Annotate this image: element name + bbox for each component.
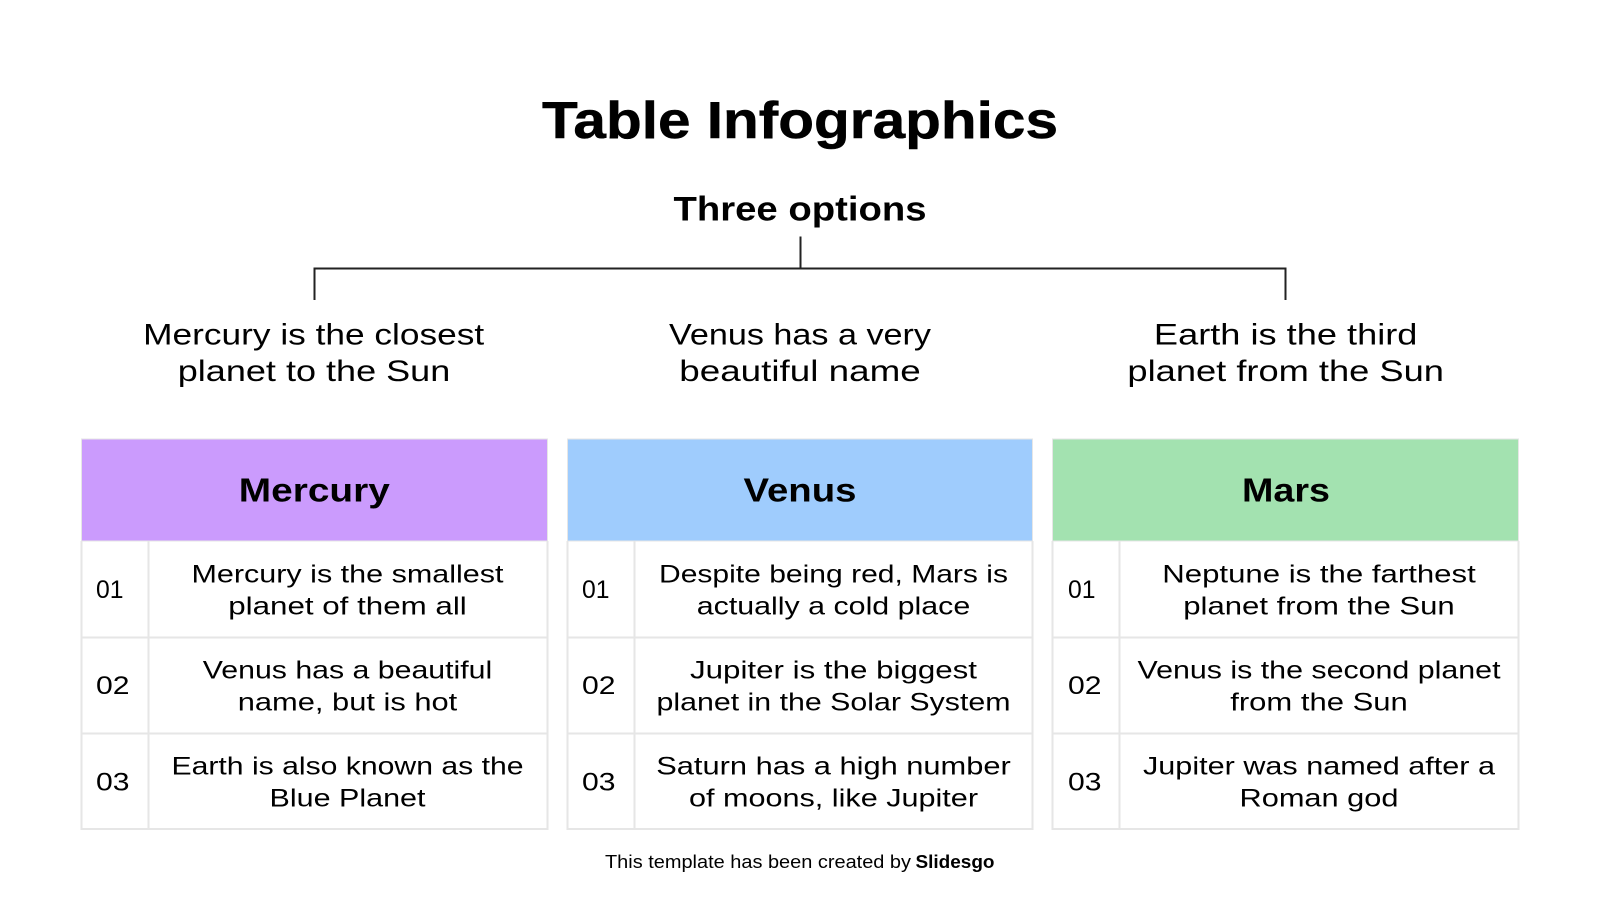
- row 01: actually a cold place: [697, 593, 970, 621]
- row 02: planet in the Solar System: [656, 689, 1010, 717]
- row 01: 01: [582, 576, 610, 604]
- row 01: planet from the Sun: [1183, 593, 1455, 621]
- row 02: [582, 657, 1010, 717]
- option description: earth: Earth is the third: [1154, 318, 1417, 352]
- option description: mercury: planet to the Sun: [178, 355, 450, 388]
- row 02: name, but is hot: [238, 689, 457, 717]
- row 03: [1068, 752, 1495, 812]
- option description: mercury: [143, 318, 485, 388]
- row 03: 03: [1068, 768, 1102, 796]
- row 03: 03: [582, 768, 616, 796]
- bracket connector: [314, 236, 1286, 300]
- header: mars: [1052, 439, 1518, 541]
- row 02: [1068, 657, 1501, 717]
- table: mercury: [82, 439, 548, 829]
- row 02: from the Sun: [1230, 689, 1408, 717]
- table grid: [568, 541, 1032, 829]
- row 03: Earth is also known as the: [172, 752, 524, 780]
- table grid: [1052, 541, 1518, 829]
- row 01: 01: [1068, 576, 1096, 604]
- option description: mercury: Mercury is the closest: [143, 318, 485, 352]
- option description: earth: [1127, 318, 1444, 388]
- row 03: [96, 752, 524, 812]
- footer credit: Slidesgo: [916, 852, 995, 872]
- row 02: Jupiter is the biggest: [690, 657, 977, 685]
- row 02: Venus has a beautiful: [203, 657, 492, 685]
- row 02: [96, 657, 492, 717]
- row 03: Blue Planet: [270, 784, 426, 812]
- table: mars: [1052, 439, 1518, 829]
- subtitle: three options: Three options: [674, 190, 926, 228]
- header: mercury: [82, 439, 548, 541]
- option description: venus: Venus has a very: [669, 318, 931, 352]
- row 01: [96, 561, 504, 621]
- row 03: Roman god: [1240, 784, 1398, 812]
- table: venus: [568, 439, 1032, 829]
- row 02: 02: [1068, 672, 1102, 700]
- header: mars: Mars: [1242, 472, 1330, 508]
- header: venus: Venus: [744, 472, 856, 508]
- row 03: Saturn has a high number: [656, 752, 1011, 780]
- row 01: Mercury is the smallest: [192, 561, 504, 589]
- row 03: 03: [96, 768, 130, 796]
- row 02: 02: [582, 672, 616, 700]
- header: venus: [568, 439, 1032, 541]
- table grid: [82, 541, 548, 829]
- row 02: 02: [96, 672, 130, 700]
- footer credit: This template has been created by: [605, 852, 911, 872]
- title: Table Infographics: [542, 92, 1058, 150]
- row 01: 01: [96, 576, 124, 604]
- option description: venus: beautiful name: [679, 355, 921, 388]
- row 01: [1068, 561, 1476, 621]
- row 02: Venus is the second planet: [1138, 657, 1501, 685]
- row 03: [582, 752, 1011, 812]
- header: mercury: Mercury: [239, 472, 391, 508]
- row 01: [582, 561, 1008, 621]
- row 01: planet of them all: [228, 593, 467, 621]
- row 01: Despite being red, Mars is: [659, 561, 1008, 589]
- option description: earth: planet from the Sun: [1127, 355, 1444, 388]
- row 01: Neptune is the farthest: [1162, 561, 1476, 589]
- row 03: Jupiter was named after a: [1143, 752, 1495, 780]
- option description: venus: [669, 318, 931, 388]
- row 03: of moons, like Jupiter: [689, 784, 978, 812]
